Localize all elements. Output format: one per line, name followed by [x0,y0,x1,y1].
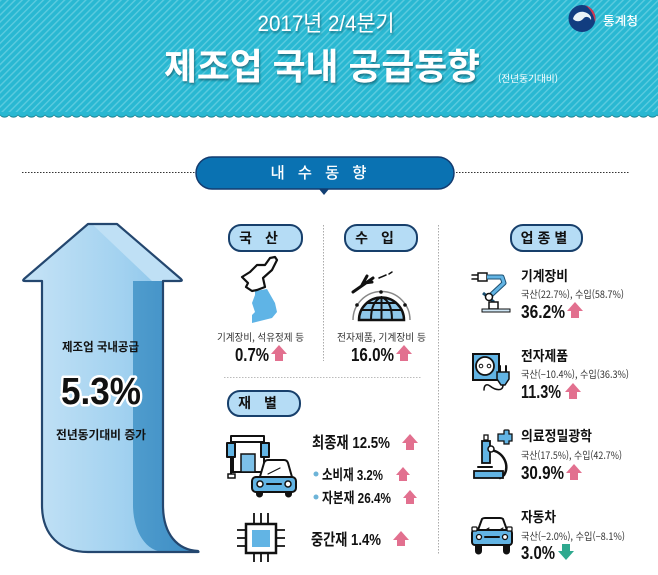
icon: robot arm [472,273,510,312]
title: 제조업 국내 공급동향 [164,38,480,90]
panel: domestic production [217,225,304,365]
icon: up arrow [271,345,287,361]
icon: up arrow [396,345,412,361]
header banner [0,0,658,118]
subtitle: period: 2017년 2/4분기 [258,11,394,36]
panel: by goods type [227,391,418,562]
value: 16.0% [351,345,394,365]
final goods: 최종재 12.5% [312,434,390,452]
badge: 수입 [355,228,407,248]
badge [511,225,582,251]
value: 3.0% [521,543,555,563]
badge [228,391,300,416]
icon: up arrow [566,464,582,480]
section heading: domestic demand: 내수동향 [270,161,380,183]
logo: Statistics Korea [568,5,638,32]
shares: 국산(−10.4%), 수입(36.3%) [521,366,629,381]
shares: 국산(17.5%), 수입(42.7%) [521,447,622,462]
section heading: domestic demand [22,157,629,195]
icon: Korean peninsula [242,257,277,323]
badge: 재별 [238,393,290,413]
item: electronics [473,346,629,402]
badge: 업종별 [521,228,571,248]
name: 전자제품 [521,346,568,366]
icon: globe and plane [353,272,410,320]
badge: 국산 [239,228,291,248]
item: medical and optical [474,426,622,483]
label: 제조업 국내공급 [62,338,139,355]
capital goods: 자본재 26.4% [322,490,391,507]
icon: up arrow [565,383,581,399]
logo text: 통계청 [603,12,638,29]
panel: by industry [472,225,629,563]
arrow shape [23,224,199,552]
name: 자동차 [521,507,556,527]
caption: 기계장비, 석유정제 등 [217,329,304,344]
vertical separators [224,225,438,555]
icon: socket and plug [473,354,509,390]
shares: 국산(22.7%), 수입(58.7%) [521,286,624,301]
name: 의료정밀광학 [521,426,592,446]
value: 11.3% [521,382,561,402]
consumer goods: 소비재 3.2% [322,467,383,484]
icon: microchip [237,513,285,562]
icon: microscope [474,430,512,478]
note: year on year: (전년동기대비) [498,71,558,85]
caption: 전년동기대비 증가 [56,426,146,443]
name: 기계장비 [521,266,568,286]
caption: 전자제품, 기계장비 등 [337,329,426,344]
item: machinery [472,266,624,322]
panel: imports [337,225,426,365]
value: 36.2% [521,302,565,322]
big arrow: total domestic supply [23,224,199,552]
intermediate goods: 중간재 1.4% [311,531,381,549]
icon: car [472,518,512,554]
icon: up arrow [567,302,583,318]
value: 5.3% [61,371,141,413]
shares: 국산(−2.0%), 수입(−8.1%) [521,528,625,543]
item: automobiles [472,507,625,563]
icon: emblem [568,5,596,32]
icon: down arrow [558,544,574,560]
value: 0.7% [235,345,269,365]
icon: factory and car [227,436,296,498]
value: 30.9% [521,463,564,483]
